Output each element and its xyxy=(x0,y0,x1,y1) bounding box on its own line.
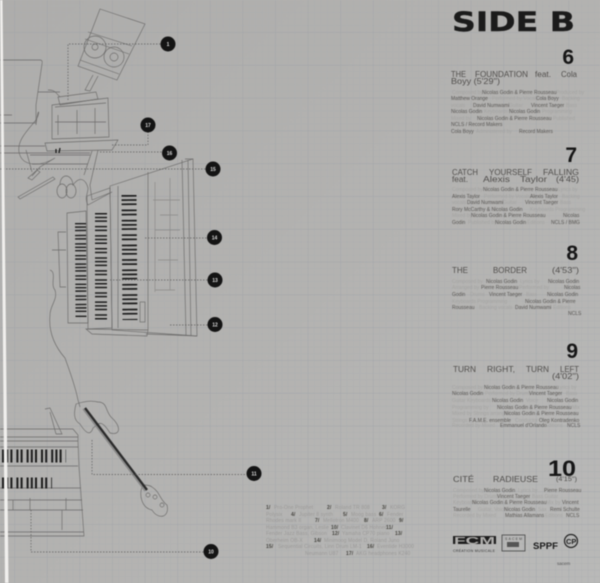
credits footnote block: Sequential Circuits, Linn Drum LM-1 xyxy=(278,544,362,550)
track 10 title: (4'15'') xyxy=(556,477,577,483)
track 7 credits: Guitar xyxy=(503,200,517,206)
keyboard 1 keys xyxy=(75,223,86,317)
bass guitar xyxy=(75,401,167,516)
track 8 credits: Nicolas Godin xyxy=(486,279,517,285)
track 10 title xyxy=(453,474,577,484)
callout 13 xyxy=(110,272,222,288)
track number 10: 10 xyxy=(548,456,576,481)
track 9 credits: Bass xyxy=(566,391,578,397)
logo: SPPF: SPPF xyxy=(533,541,558,552)
logo: FCM: CRÉATION MUSICALE xyxy=(453,548,496,553)
credits footnote block: Jupiter 8 synth xyxy=(299,512,333,518)
callout 12: 12 xyxy=(212,322,218,328)
track 7 credits: Alexis Taylor xyxy=(530,194,558,200)
track 6 title xyxy=(451,69,577,86)
microphone head xyxy=(28,170,40,180)
track 8 credits: Bass xyxy=(526,292,538,298)
credits footnote block: Polysix xyxy=(266,512,283,518)
track 6 credits: Vincent Taeger xyxy=(531,103,565,109)
track 7 credits: Nicolas Godin & Pierre Rousseau xyxy=(483,187,558,193)
track 8 credits: Nicolas xyxy=(564,285,581,291)
track 8 credits: Rousseau xyxy=(452,305,475,311)
track 6 credits: Bass xyxy=(566,103,578,109)
track 9 credits: Strings xyxy=(452,418,468,424)
track 9 credits: Lyrics by xyxy=(557,385,577,391)
track 9 credits: Mix xyxy=(572,405,580,411)
track 8 title xyxy=(452,265,579,275)
track 8 xyxy=(452,242,582,317)
callout 1: 1 xyxy=(167,42,170,48)
track 7 title: FALLING xyxy=(543,167,579,177)
track 9 title xyxy=(453,364,579,381)
callout 15: 15 xyxy=(210,167,216,173)
credits footnote block: Eventide H3000 xyxy=(377,544,414,550)
track 6 xyxy=(451,46,585,135)
track 7 title: YOURSELF xyxy=(489,167,532,177)
logo: CP: CP xyxy=(566,537,576,546)
logos xyxy=(453,534,578,566)
track 10 credits: Mathias Allamans xyxy=(505,513,545,519)
keyboard lower keys xyxy=(2,478,52,488)
mixer and desk xyxy=(0,92,118,200)
track 6 credits: Record Makers xyxy=(519,129,553,135)
credits footnote block: 1/ xyxy=(266,505,271,511)
track 9 credits: Emmanuel d'Orlando xyxy=(500,423,547,429)
track 8 credits: Keyboards Programming xyxy=(452,299,508,305)
track 10 credits: Guitar, Voice xyxy=(478,507,507,513)
track 6 credits: Nicolas Godin xyxy=(451,109,482,115)
track 6 credits: Produced by xyxy=(556,90,585,96)
callout 17 xyxy=(112,118,156,145)
track 10 credits: Nicolas Godin xyxy=(504,507,535,513)
track 9 credits: Recorded by Mixed xyxy=(452,423,495,429)
track 7 credits: Bass xyxy=(560,200,572,206)
track 10 credits: Taurelle xyxy=(453,507,471,513)
track 10 title: RADIEUSE xyxy=(493,474,538,484)
callout 11: 11 xyxy=(251,472,257,478)
track 10 title: CITÉ xyxy=(453,474,474,484)
track 6 credits: Matthew Orange xyxy=(451,96,488,102)
credits footnote block: 12/ xyxy=(332,531,340,537)
callout 14 xyxy=(145,230,222,245)
track 7 credits: Nicolas Godin xyxy=(495,220,526,226)
track number 6: 6 xyxy=(562,46,574,69)
track 6 title: Cola xyxy=(561,69,577,79)
track 7 credits: Nicolas Godin & Pierre Rousseau xyxy=(471,213,546,219)
speaker monitor xyxy=(78,9,145,91)
track 6 credits: Nicolas Godin & Pierre Rousseau xyxy=(482,90,557,96)
credits footnote block: 11/ xyxy=(386,525,393,531)
track 8 credits: Lyrics by xyxy=(520,279,540,285)
track 6 title: FOUNDATION xyxy=(475,69,528,79)
callout 13: 13 xyxy=(212,278,218,284)
track 9 title: LEFT xyxy=(560,364,579,374)
track 6 title: THE xyxy=(451,69,466,79)
track 7 credits: NCLS / BMG xyxy=(551,220,580,226)
callout 1 xyxy=(68,36,176,100)
track 8 credits: Arranged by xyxy=(452,285,480,291)
credits footnote block: Pro-One Prophet xyxy=(274,505,314,511)
track 8 credits: Nicolas Godin xyxy=(547,292,578,298)
track 8 credits: Nicolas Godin & Pierre xyxy=(525,299,576,305)
credits footnote block: Moog bass xyxy=(351,512,377,518)
track 10 credits: Remi Schulte xyxy=(550,507,580,513)
credits footnote block: 7/ xyxy=(315,518,320,524)
track number 7: 7 xyxy=(565,144,577,167)
credits footnote block: Hammond B3 organ, Leslie xyxy=(266,525,329,531)
track 9 credits: Nicolas Godin xyxy=(547,398,578,404)
synthesizer stack xyxy=(52,159,197,336)
track 9 credits: Nicolas Godin xyxy=(452,391,483,397)
track 7 credits: Alexis Taylor xyxy=(452,194,480,200)
logo: SACEM box: SACEM xyxy=(505,537,522,541)
credits footnote block: 14/ xyxy=(314,538,322,544)
callout 16: 16 xyxy=(167,151,172,157)
credits footnote block: 8/ xyxy=(364,518,369,524)
equipment drawing xyxy=(0,9,197,536)
track 9 title: RIGHT, xyxy=(487,364,515,374)
track 9 credits: Voice xyxy=(526,398,538,404)
track 10 credits: Keyboards xyxy=(453,500,477,506)
track 7 title xyxy=(452,167,579,184)
track 9 credits: Oleg Kontradenko xyxy=(539,418,580,424)
track 8 credits: Editions xyxy=(553,305,571,311)
callout 16 xyxy=(100,146,177,160)
track 9 credits: Nicolas Godin & Pierre Rousseau xyxy=(504,411,579,417)
track 10 credits: Editions xyxy=(545,513,563,519)
track 8 credits: Backing vocals xyxy=(479,305,513,311)
track 6 credits: Guitar xyxy=(509,103,523,109)
track 7 credits: Mixed by xyxy=(452,213,473,219)
track 10 credits: Sax xyxy=(538,507,547,513)
credits footnote block: Yamaha CP70 piano xyxy=(342,531,390,537)
logo: FCM: FCM xyxy=(454,536,495,547)
track 9 credits: Nicolas Godin & Pierre Rousseau xyxy=(497,405,572,411)
track 9 credits: Programming by xyxy=(452,405,489,411)
track 7 title: feat. xyxy=(452,174,468,184)
callout 10 xyxy=(31,510,218,559)
track 9 credits: Nicolas Godin & Pierre Rousseau xyxy=(484,385,559,391)
keyboard upper keys xyxy=(2,450,66,462)
credits footnote block: Fender Jazz Bass, Gibson xyxy=(266,531,327,537)
track 6 credits: Published xyxy=(553,116,575,122)
track 6 credits: Performed by Vocals xyxy=(492,96,539,102)
credits footnote block: ARP 2600 xyxy=(372,518,396,524)
track 10 credits: Recorded by Mixed xyxy=(453,513,496,519)
track 10 credits: Vincent xyxy=(562,500,579,506)
track 9 credits: Vincent Taeger xyxy=(529,391,563,397)
callout 12 xyxy=(170,317,222,332)
credits footnote block: 13/ xyxy=(395,531,403,537)
credits footnote block: Neumann U87 xyxy=(305,551,338,557)
credits footnote block: 2/ xyxy=(327,505,332,511)
credits footnote block: 5/ xyxy=(343,512,348,518)
track 10 credits: Lyrics by xyxy=(518,488,538,494)
track 6 credits: Cola Boyy xyxy=(451,129,474,135)
track 10 credits: Nicolas Godin xyxy=(484,488,515,494)
track 8 title: (4'53'') xyxy=(552,265,579,275)
track number 8: 8 xyxy=(566,242,578,265)
logo: FCM xyxy=(453,536,496,553)
track 10 credits: NCLS xyxy=(566,513,580,519)
track 6 credits: vocals xyxy=(451,103,466,109)
track 8 credits: Nicolas Godin xyxy=(548,279,579,285)
track 7 credits: David Numwami xyxy=(467,200,503,206)
credits footnote block: 6/ xyxy=(379,512,384,518)
track 10 credits: Nicolas Godin & Pierre Rousseau xyxy=(472,500,547,506)
callout 17: 17 xyxy=(145,123,151,129)
callout 11 xyxy=(92,440,262,481)
track 10 credits: Vincent Taeger xyxy=(497,494,531,500)
title: SIDE B: SIDE B xyxy=(452,7,575,38)
track 8 credits: Performed by xyxy=(519,285,550,291)
track 8 credits: Pierre Rousseau xyxy=(481,285,518,291)
track 7 credits: vocals xyxy=(452,200,467,206)
logo: small label: sacem xyxy=(557,561,571,566)
track 9 credits: Conductor xyxy=(515,418,538,424)
track 9 credits: Composed by xyxy=(452,385,483,391)
track 6 credits: Keyboards xyxy=(484,109,508,115)
credits footnote block: Roland TR 808 xyxy=(335,505,370,511)
track 6 credits: Nicolas Godin xyxy=(509,109,540,115)
track 7 xyxy=(452,144,586,226)
monitor screen xyxy=(0,60,60,123)
track 6 credits: Nicolas Godin & Pierre Rousseau xyxy=(477,116,552,122)
credits footnote block: 4/ xyxy=(291,512,296,518)
track 7 credits: Performed by Vocals xyxy=(484,194,531,200)
track number 9: 9 xyxy=(566,340,578,363)
credits footnote block: Rhodes mark II xyxy=(266,518,301,524)
track 7 credits: Godin xyxy=(452,220,466,226)
track 9 credits: Mixed by Strings arranged xyxy=(452,411,511,417)
numbered callouts xyxy=(0,36,262,559)
track 6 credits: Mixed by xyxy=(451,116,472,122)
track 10 credits: Bass Guitar xyxy=(532,494,558,500)
track 9 title: TURN xyxy=(526,364,549,374)
track 7 credits: Editions xyxy=(527,220,545,226)
track 10 credits: Composed by xyxy=(453,488,484,494)
credits footnote block: 16/ xyxy=(367,544,375,550)
track 10 xyxy=(453,456,581,519)
main cable to guitar xyxy=(50,270,80,407)
keytar synth rod xyxy=(18,177,55,199)
credits footnote block: 10/ xyxy=(331,525,339,531)
credits footnote block: 15/ xyxy=(266,544,274,550)
track 9 title: (4'02'') xyxy=(552,371,579,381)
callout 10: 10 xyxy=(208,550,214,556)
track 7 title: (4'45) xyxy=(556,174,579,184)
track 6 credits: Administered by xyxy=(476,129,512,135)
track 7 title: CATCH xyxy=(452,167,478,177)
credits footnote block: AKG headphones K240 xyxy=(356,551,411,557)
track 8 credits: David Numwami xyxy=(515,305,551,311)
track 9 title: TURN xyxy=(453,364,476,374)
track 7 title: Taylor xyxy=(520,174,547,184)
track 9 credits: F.A.M.E. ensemble xyxy=(469,418,511,424)
track 6 credits: David Numwami xyxy=(473,103,509,109)
track 9 credits: NCLS xyxy=(567,423,581,429)
callout 14: 14 xyxy=(212,236,217,242)
track 6 credits: Composed by xyxy=(452,90,483,96)
track 9 credits: Editions xyxy=(545,423,563,429)
callout 15 xyxy=(0,162,220,176)
track 9 xyxy=(452,340,581,429)
track 9 credits: Performed by Drums xyxy=(485,391,532,397)
track 8 credits: Composed by xyxy=(452,279,483,285)
credits footnote block: 9/ xyxy=(399,518,404,524)
track 7 credits: Keyboards Programming xyxy=(530,207,586,213)
track 7 credits: Lyrics by xyxy=(558,187,578,193)
track 6 credits: NCLS / Record Makers xyxy=(451,122,503,128)
credits footnote block: Mellotron M400 xyxy=(323,518,359,524)
track 6 credits: Programming xyxy=(542,109,572,115)
track 8 title: BORDER xyxy=(493,265,527,275)
track 7 credits: Backing xyxy=(562,194,580,200)
track 6 credits: Cola Boyy xyxy=(536,96,559,102)
credits footnote block: Oberheim OB-X xyxy=(266,538,303,544)
track 7 credits: Vincent Taeger xyxy=(525,200,559,206)
keyboard 2 keys xyxy=(95,213,107,323)
headphones xyxy=(57,176,112,205)
track 6 title: feat. xyxy=(535,69,551,79)
track 10 credits: Mix by xyxy=(546,500,561,506)
track 7 credits: Published by xyxy=(468,220,497,226)
credits footnote block: 3/ xyxy=(382,505,387,511)
keyboard 3 keys xyxy=(129,195,130,320)
track 7 credits: Rory McCarthy & Nicolas Godin xyxy=(452,207,523,213)
track 7 credits: Nicolas xyxy=(563,213,580,219)
track 8 credits: Vincent Taeger xyxy=(489,292,523,298)
track 10 credits: Performed by Drums xyxy=(453,494,500,500)
track 7 title: Alexis xyxy=(483,174,510,184)
bottom left keyboard xyxy=(0,408,84,536)
track 6 title: Boyy (5'29'') xyxy=(451,76,500,86)
credits footnote block: Clavinet D6 Hohner xyxy=(341,525,387,531)
track 7 credits: Composed by xyxy=(452,187,483,193)
track 8 title: THE xyxy=(452,265,468,275)
credits footnote block: 17/ xyxy=(346,551,354,557)
track 8 credits: NCLS xyxy=(568,311,582,317)
credits footnote block: KORG xyxy=(390,505,405,511)
credits footnote block: Minimoog Model D, Roland Juno xyxy=(324,538,400,544)
track 6 credits: Backing xyxy=(562,96,580,102)
cable and microphone xyxy=(19,90,60,176)
track 9 credits: Nicolas Godin xyxy=(492,398,523,404)
track 8 credits: Godin xyxy=(452,292,466,298)
credits footnote block: Fender xyxy=(387,512,404,518)
track 9 credits: Guitar Keyboards xyxy=(452,398,491,404)
track 8 credits: Drums xyxy=(470,292,485,298)
track 10 credits: Pierre Rousseau xyxy=(544,488,581,494)
